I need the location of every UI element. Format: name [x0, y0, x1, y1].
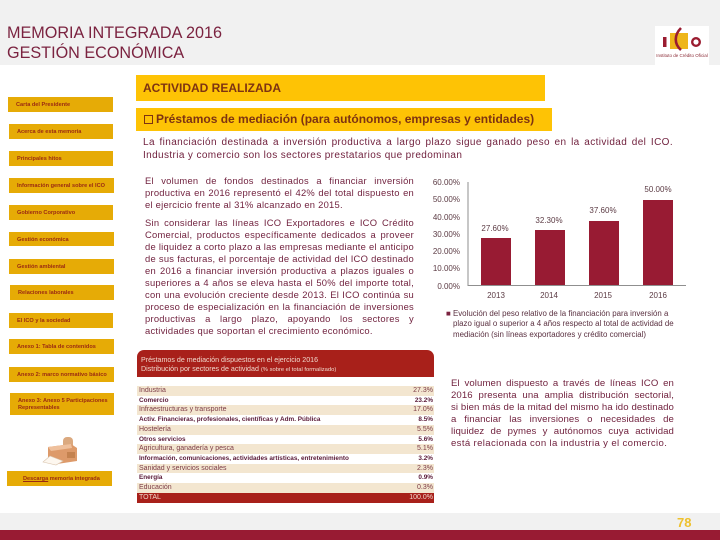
nav item: Información general sobre el ICO: [17, 183, 105, 189]
value labels: 37.60%: [589, 206, 617, 215]
y axis labels: 0.00%: [437, 282, 460, 291]
y axis labels: 50.00%: [433, 195, 460, 204]
text block: volumen dispuesto: 2016 presenta una amplia distribución sectorial,: [451, 390, 674, 401]
table row: 23.2%: [415, 397, 433, 404]
nav item: [9, 313, 113, 328]
section band: actividad realizada: ACTIVIDAD REALIZADA: [143, 81, 281, 95]
logo: ICO: [655, 26, 709, 65]
table row: [139, 436, 433, 442]
table total: TOTAL: [139, 494, 161, 501]
lead text: [143, 137, 673, 161]
table row: 0.9%: [418, 474, 433, 481]
nav item: Anexo 2: marco normativo básico: [17, 372, 107, 378]
table header: Distribución por sectores de actividad (% sobre el total formalizado): [141, 364, 336, 372]
title: MEMORIA INTEGRADA 2016: [7, 24, 222, 42]
year labels: 2016: [649, 291, 667, 300]
table row: [137, 425, 434, 435]
text block: sin considerar: con una evolución creciente desde 2013. El ICO continúa su: [145, 289, 414, 300]
header band: [0, 0, 720, 65]
bar chart: [433, 178, 686, 300]
nav item: El ICO y la sociedad: [17, 318, 70, 324]
title: GESTIÓN ECONÓMICA: [7, 44, 184, 62]
table header: Préstamos de mediación dispuestos en el ejercicio 2016: [141, 356, 318, 364]
nav item: [9, 205, 113, 220]
text block: volumen dispuesto: está relacionada con la industria y el comercio.: [451, 438, 667, 449]
table row: 2.3%: [417, 465, 433, 472]
table header: [137, 350, 434, 377]
year labels: [487, 291, 667, 300]
nav item: [10, 285, 114, 300]
table row: [137, 386, 434, 396]
nav item: [9, 339, 114, 354]
table row: Infraestructuras y transporte: [139, 406, 227, 413]
nav item: download: [7, 471, 112, 486]
table row: Comercio: [139, 397, 168, 404]
text block: volumen de fondos: [145, 175, 414, 210]
nav item: [9, 151, 113, 166]
nav item: Relaciones laborales: [18, 290, 74, 296]
text block: volumen de fondos: El volumen de fondos destinados a financiar inversión: [145, 175, 414, 186]
table total: [137, 493, 434, 503]
chart note: [446, 309, 674, 339]
nav item: [9, 232, 114, 246]
nav item: Gestión económica: [17, 237, 69, 243]
y axis labels: 10.00%: [433, 264, 460, 273]
table row: 0.3%: [417, 484, 433, 491]
table row: [139, 474, 433, 481]
text block: volumen dispuesto: a financiar las inversiones o necesidades de: [451, 414, 674, 425]
table total: 100.0%: [409, 494, 433, 501]
table row: 3.2%: [418, 455, 433, 462]
footer bar: [0, 530, 720, 540]
y axis labels: 60.00%: [433, 178, 460, 187]
nav item: [9, 367, 114, 382]
text block: sin considerar: superiores a 4 años se eleva hasta el 50% del importe total,: [145, 277, 414, 288]
axis: [468, 182, 686, 286]
subsection band: préstamos de mediación: Préstamos de mediación (para autónomos, empresas y entidades): [156, 112, 534, 126]
table row: Energía: [139, 474, 162, 481]
value labels: 32.30%: [535, 216, 563, 225]
text block: volumen dispuesto: El volumen dispuesto a través de líneas ICO en: [451, 378, 674, 389]
chart note: ■ Evolución del peso relativo de la financiación para inversión a: [446, 309, 668, 318]
text block: sin considerar: en 2016 a financiar inversión productiva a plazos iguales o: [145, 265, 414, 276]
lead text: Industria y comercio son los sectores prestatarios que predominan: [143, 150, 462, 161]
nav item: [8, 97, 113, 112]
nav item: Principales hitos: [17, 156, 62, 162]
text block: sin considerar: Sin considerar las líneas ICO Exportadores e ICO Crédito: [145, 217, 414, 228]
value labels: [481, 185, 672, 233]
table row: Otros servicios: [139, 436, 186, 442]
icon: printer: [42, 437, 77, 466]
bars: [481, 200, 673, 285]
table row: 8.5%: [418, 416, 433, 423]
text block: volumen dispuesto: si bien más de la mitad del mismo ha ido destinado: [451, 402, 674, 413]
nav item: Anexo 3: Anexo 5 Participaciones: [18, 398, 108, 404]
nav item: Carta del Presidente: [16, 102, 70, 108]
y axis labels: [433, 178, 460, 291]
table row: [137, 444, 434, 454]
lead text: La financiación destinada a inversión productiva a largo plazo sigue ganado peso en la actividad del ICO.: [143, 137, 673, 148]
y axis labels: 20.00%: [433, 247, 460, 256]
table row: [137, 464, 434, 473]
year labels: 2014: [540, 291, 558, 300]
table row: [137, 483, 434, 493]
text block: volumen dispuesto: liquidez de pymes y autónomos cuya actividad: [451, 426, 674, 437]
title: [7, 24, 222, 62]
nav item: download: Descarga memoria integrada: [23, 476, 100, 482]
text block: volumen dispuesto: [451, 378, 674, 449]
table row: 5.1%: [417, 445, 433, 452]
table row: 17.0%: [413, 406, 433, 413]
y axis labels: 40.00%: [433, 213, 460, 222]
nav item: Representables: [18, 405, 60, 411]
nav item: Acerca de esta memoria: [17, 129, 81, 135]
chart note: plazo igual o superior a 4 años respecto al total de actividad de: [453, 319, 674, 328]
value labels: 50.00%: [644, 185, 672, 194]
table row: Hostelería: [139, 426, 171, 433]
subsection band: préstamos de mediación: [136, 108, 552, 131]
nav item: [9, 124, 113, 139]
text block: sin considerar: Comercial, productos específicamente dedicados a proveer: [145, 229, 414, 240]
chart note: mediación (sin líneas exportadores y crédito comercial): [453, 330, 646, 339]
nav item: Gobierno Corporativo: [17, 210, 75, 216]
text block: volumen de fondos: el ejercicio frente al 31% alcanzado en 2015.: [145, 199, 343, 210]
table row: Agricultura, ganadería y pesca: [139, 445, 234, 452]
table row: Educación: [139, 484, 172, 491]
table row: Sanidad y servicios sociales: [139, 465, 227, 472]
text block: sin considerar: proceso de especialización en la financiación de inversiones: [145, 301, 414, 312]
nav item: [10, 393, 114, 415]
footer band: [0, 513, 720, 530]
table row: [139, 397, 433, 404]
table row: Información, comunicaciones, actividades artísticas, entretenimiento: [139, 455, 349, 462]
table row: Industria: [139, 387, 166, 394]
y axis labels: 30.00%: [433, 230, 460, 239]
year labels: 2013: [487, 291, 505, 300]
year labels: 2015: [594, 291, 612, 300]
text block: sin considerar: [145, 217, 414, 336]
table row: 27.3%: [413, 387, 433, 394]
section band: actividad realizada: [136, 75, 545, 101]
sidebar navigation: [7, 97, 114, 486]
table row: 5.6%: [418, 436, 433, 442]
page number: 78: [677, 515, 691, 530]
text block: sin considerar: de sus facturas, el porcentaje de actividad del ICO destinado: [145, 253, 414, 264]
table row: Activ. Financieras, profesionales, científicas y Adm. Pública: [139, 416, 320, 423]
nav item: Anexo 1: Tabla de contenidos: [17, 344, 96, 350]
value labels: 27.60%: [481, 224, 509, 233]
table row: 5.5%: [417, 426, 433, 433]
nav item: Gestión ambiental: [17, 264, 66, 270]
text block: sin considerar: de liquidez a corto plazo a las empresas mediante el anticipo: [145, 241, 414, 252]
table: distribución por sectores: [137, 350, 434, 503]
text block: volumen de fondos: productiva en 2016 representó el 42% del total dispuesto en: [145, 187, 414, 198]
table row: [139, 416, 433, 423]
table row: [137, 405, 434, 415]
text block: sin considerar: productivas a largo plazo, apoyando los sectores y: [145, 313, 414, 324]
logo: ICO: Instituto de Crédito Oficial: [656, 53, 708, 58]
text block: sin considerar: actividades que soportan el crecimiento económico.: [145, 325, 373, 336]
nav item: [9, 259, 114, 274]
nav item: [9, 178, 114, 193]
